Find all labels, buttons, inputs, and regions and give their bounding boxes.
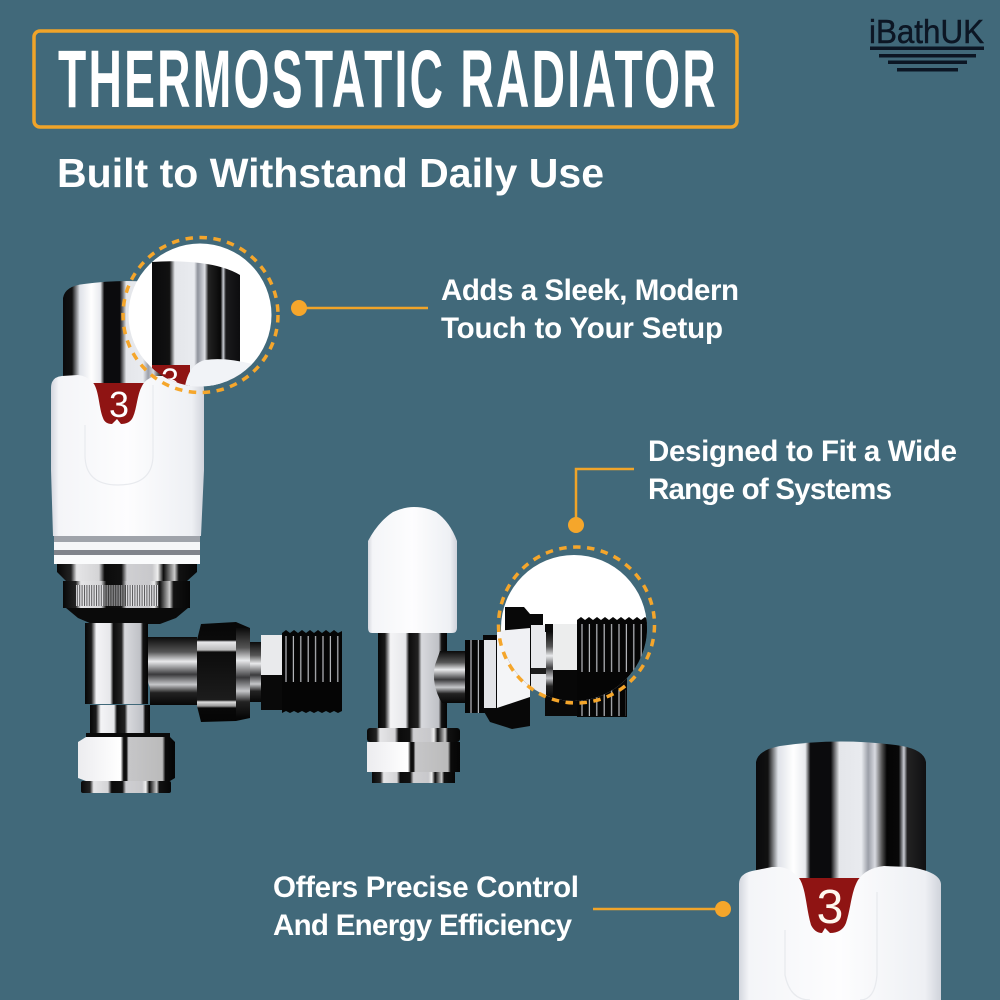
callout text: sleek: Adds a Sleek, Modern (441, 274, 739, 307)
white lens (128, 244, 272, 386)
logo: iBathUK: iBathUK (869, 13, 984, 50)
dial number: 3 (109, 384, 129, 425)
stem (378, 633, 447, 728)
hex nut on arm (197, 622, 250, 722)
valve stem (85, 623, 148, 704)
callout text: systems: Designed to Fit a Wide (648, 435, 957, 468)
dashed ring (498, 547, 654, 703)
threaded tail (282, 630, 342, 713)
lower compression nut (78, 733, 175, 793)
chrome head (63, 281, 192, 385)
compression nut (367, 728, 460, 783)
knurled nut (63, 581, 190, 608)
callout text: sleek (441, 274, 739, 345)
callout lens: chrome head (123, 238, 278, 398)
lower stem (90, 705, 150, 735)
leader: systems callout (568, 469, 634, 533)
red dial window (92, 383, 146, 426)
callout text: systems: Range of Systems (648, 473, 892, 506)
closeup: thermostatic head (739, 742, 941, 1000)
title box (34, 31, 737, 127)
dashed ring (123, 238, 278, 392)
hex nut (483, 628, 530, 729)
callout text: systems (648, 435, 957, 506)
white body (51, 375, 204, 536)
callout text: control (273, 871, 579, 942)
callout text: control: And Energy Efficiency (273, 909, 573, 942)
logo: iBathUK (869, 13, 984, 72)
red dial window (798, 878, 862, 936)
lower tail (545, 650, 627, 717)
dark flare (66, 608, 188, 624)
subtitle: Built to Withstand Daily Use (57, 150, 604, 196)
thermostatic valve (51, 281, 342, 793)
callout text: sleek: Touch to Your Setup (441, 312, 723, 345)
connector hex (261, 635, 282, 710)
valve side arm (145, 637, 197, 705)
manual valve (367, 507, 627, 783)
callout lens: threaded connector (496, 547, 654, 718)
white rings (54, 536, 200, 564)
white dome cap (368, 507, 457, 633)
magnified connector (501, 607, 647, 701)
dial number: 3 (817, 881, 843, 934)
chrome collar on arm (236, 628, 250, 718)
leader: head callout (291, 300, 428, 316)
chrome head (756, 742, 926, 880)
side arm (434, 651, 470, 703)
magnified head: 3 (161, 362, 179, 398)
callout text: control: Offers Precise Control (273, 871, 579, 904)
arm threads (465, 640, 485, 713)
chrome collar (57, 564, 197, 581)
magnified head (152, 261, 252, 398)
white body (739, 866, 941, 1000)
leader: control callout (593, 901, 731, 917)
white lens (501, 555, 647, 701)
